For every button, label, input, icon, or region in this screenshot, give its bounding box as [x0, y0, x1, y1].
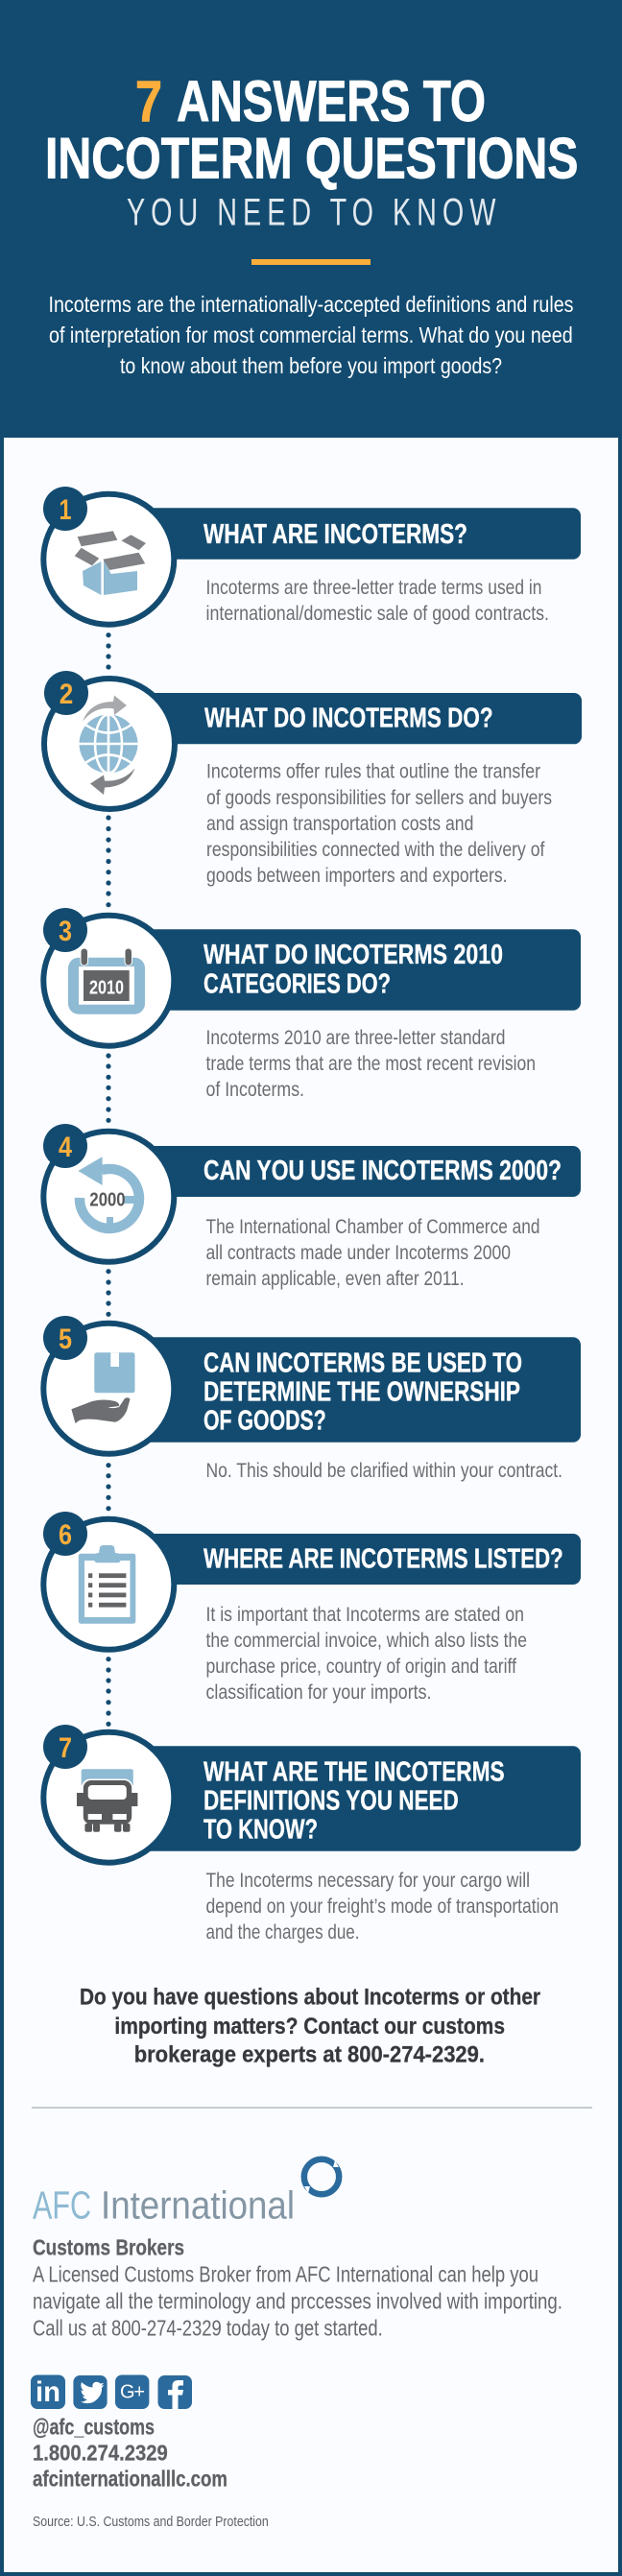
contact details [33, 2414, 227, 2492]
icon: facebook [157, 2375, 192, 2409]
call to action: Do you have questions about Incoterms or other [80, 1985, 540, 2011]
panel: question 2 [44, 671, 582, 887]
heading bar 5: CAN INCOTERMS BE USED TO [203, 1348, 522, 1378]
answer 6: purchase price, country of origin and tariff [205, 1656, 516, 1678]
call to action: brokerage experts at 800-274-2329. [134, 2042, 485, 2068]
badge 1: 1 [60, 494, 71, 526]
answer 3: of Incoterms. [205, 1079, 304, 1101]
answer 4 [205, 1216, 539, 1290]
answer 1: international/domestic sale of good contracts. [205, 603, 549, 625]
icon circle 7 [43, 1732, 174, 1863]
title [45, 69, 578, 190]
connector dots 5-6 [106, 1463, 111, 1511]
call to action: importing matters? Contact our customs [114, 2014, 505, 2039]
answer 2: of goods responsibilities for sellers and buyers [206, 787, 552, 809]
orange divider [251, 259, 371, 265]
company description: Customs Brokers [33, 2234, 184, 2259]
heading bar 5: OF GOODS? [203, 1405, 326, 1436]
logo: AFC International: AFC [33, 2182, 91, 2227]
badge 6 [43, 1512, 87, 1556]
source: Source: U.S. Customs and Border Protection [33, 2514, 269, 2530]
intro text: to know about them before you import goods? [120, 353, 502, 378]
connector dots 4-5 [106, 1269, 111, 1317]
icon: hand holding package [71, 1352, 134, 1423]
icon: open box [75, 531, 146, 595]
answer 4: The International Chamber of Commerce and [205, 1216, 539, 1238]
heading bar 1 [108, 508, 581, 560]
icon: rewind arrow 2000: 2000 [89, 1190, 126, 1211]
badge 2: 2 [60, 679, 73, 710]
badge 6: 6 [59, 1519, 72, 1551]
answer 7: The Incoterms necessary for your cargo will [205, 1870, 530, 1892]
answer 2: goods between importers and exporters. [206, 865, 507, 887]
answer 6: It is important that Incoterms are stated on [205, 1604, 524, 1626]
icon: truck [77, 1769, 137, 1832]
connector dots 1-2 [106, 632, 111, 670]
answer 2 [206, 760, 552, 887]
contact details: 1.800.274.2329 [33, 2441, 168, 2466]
panel: question 7 [43, 1725, 581, 1944]
social icons [31, 2374, 192, 2409]
badge 7 [43, 1725, 87, 1769]
icon: google plus: G+ [120, 2382, 145, 2403]
answer 3 [205, 1027, 536, 1101]
contact details: @afc_customs [33, 2414, 155, 2439]
panel: question 3 [43, 908, 581, 1101]
badge 3: 3 [59, 916, 72, 947]
heading bar 3: CATEGORIES DO? [203, 968, 391, 999]
answer 1: Incoterms are three-letter trade terms used in [205, 577, 541, 599]
heading bar 3: WHAT DO INCOTERMS 2010 [203, 940, 503, 970]
logo: AFC International [33, 2159, 339, 2227]
icon: calendar 2010: 2010 [89, 977, 124, 998]
heading bar 7: WHAT ARE THE INCOTERMS [203, 1756, 505, 1787]
heading bar 1: WHAT ARE INCOTERMS? [203, 519, 467, 550]
answer 6: classification for your imports. [205, 1682, 432, 1704]
answer 2: responsibilities connected with the delivery of [206, 839, 545, 861]
heading bar 3 [108, 929, 581, 1011]
badge 1 [43, 487, 87, 531]
icon: globe with arrows [79, 695, 138, 795]
company description: Call us at 800-274-2329 today to get started. [33, 2316, 383, 2341]
answer 5: No. This should be clarified within your contract. [205, 1460, 562, 1482]
panel: question 1 [43, 487, 581, 625]
badge 4 [43, 1124, 87, 1168]
title: ANSWERS TO [177, 69, 486, 133]
answer 1 [205, 577, 549, 625]
icon: google plus [115, 2374, 149, 2409]
heading bar 6 [108, 1534, 581, 1585]
icon circle 5 [43, 1324, 174, 1454]
heading bar 2 [108, 693, 582, 744]
connector dots 2-3 [106, 815, 111, 907]
icon: linkedin: in [36, 2376, 60, 2408]
answer 7: depend on your freight’s mode of transportation [205, 1896, 559, 1918]
badge 7: 7 [59, 1732, 72, 1764]
connector dots 6-7 [106, 1657, 111, 1727]
badge 5: 5 [59, 1324, 72, 1355]
answer 2: Incoterms offer rules that outline the transfer [206, 760, 540, 783]
heading bar 4 [108, 1146, 581, 1197]
icon circle 3 [43, 916, 174, 1046]
panel: question 4 [43, 1124, 581, 1290]
answer 4: remain applicable, even after 2011. [205, 1268, 465, 1290]
icon: twitter [73, 2375, 108, 2409]
answer 4: all contracts made under Incoterms 2000 [205, 1242, 511, 1264]
icon circle 6 [43, 1519, 174, 1650]
answer 7: and the charges due. [205, 1921, 359, 1944]
panel: question 5 [43, 1316, 581, 1482]
icon: rewind arrow 2000 [78, 1157, 139, 1228]
answer 6: the commercial invoice, which also lists the [205, 1630, 527, 1652]
panel: question 6 [43, 1512, 581, 1704]
heading bar 5: DETERMINE THE OWNERSHIP [203, 1377, 520, 1408]
answer 3: trade terms that are the most recent revision [205, 1053, 536, 1075]
icon circle 2 [44, 679, 175, 809]
call to action [80, 1985, 540, 2068]
heading bar 2: WHAT DO INCOTERMS DO? [204, 703, 493, 733]
icon: linkedin [31, 2374, 65, 2409]
heading bar 7: TO KNOW? [203, 1814, 318, 1845]
answer 7 [205, 1870, 559, 1944]
connector dots 3-4 [106, 1053, 111, 1123]
badge 2 [44, 671, 88, 715]
company description [33, 2234, 562, 2341]
badge 3 [43, 908, 87, 952]
heading bar 7 [108, 1746, 581, 1851]
logo: AFC International: International [101, 2182, 295, 2227]
badge 5 [43, 1316, 87, 1360]
icon: clipboard [79, 1545, 135, 1624]
heading bar 5 [108, 1337, 581, 1443]
badge 4: 4 [59, 1132, 72, 1163]
subtitle: YOU NEED TO KNOW [127, 191, 496, 234]
answer 3: Incoterms 2010 are three-letter standard [205, 1027, 505, 1049]
heading bar 7: DEFINITIONS YOU NEED [203, 1785, 459, 1816]
icon: calendar 2010 [68, 948, 145, 1014]
intro text [48, 292, 574, 378]
contact details: afcinternationalllc.com [33, 2467, 227, 2492]
icon circle 4 [43, 1132, 174, 1262]
icon circle 1 [43, 494, 174, 625]
answer 2: and assign transportation costs and [206, 813, 473, 835]
answer 6 [205, 1604, 527, 1704]
title: 7 [135, 69, 162, 133]
